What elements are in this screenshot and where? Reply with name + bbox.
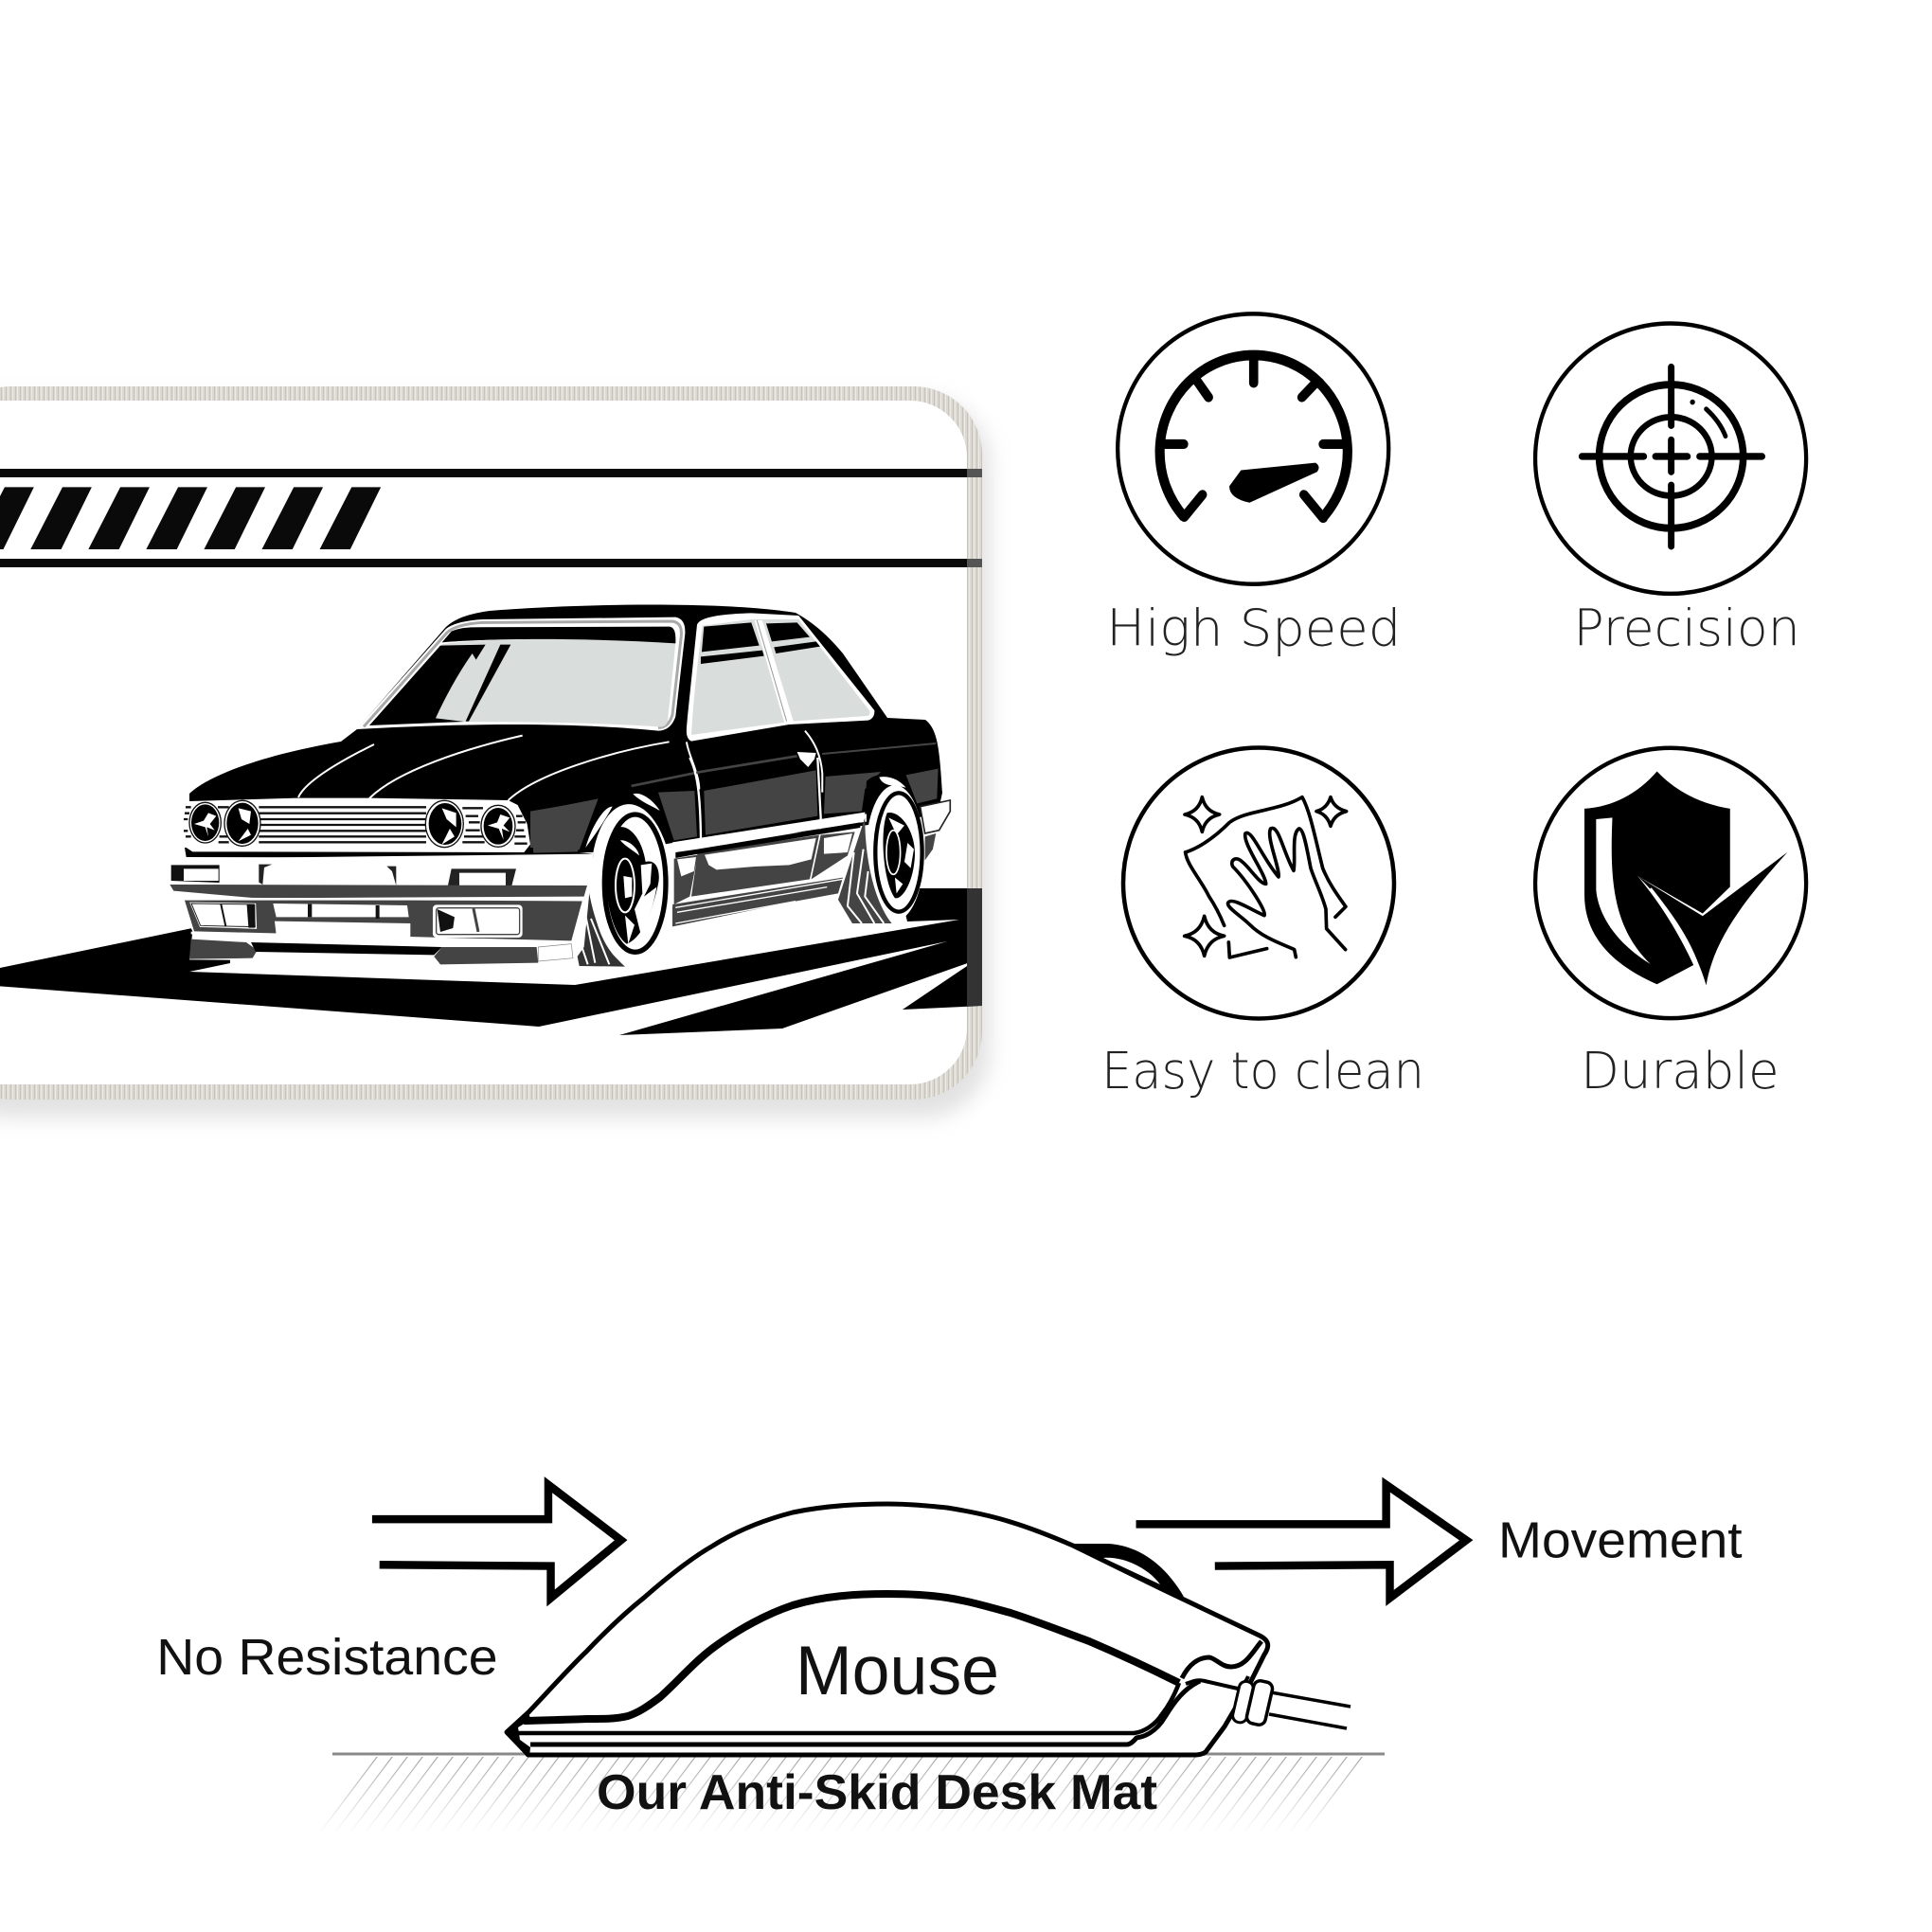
mouse outline (507, 1504, 1351, 1757)
label: Precision: Precision (1573, 599, 1800, 658)
rear bumper (921, 800, 950, 833)
lower door panels (674, 832, 855, 904)
front wheel tyre (576, 890, 625, 967)
lip spoiler (183, 898, 584, 901)
side windows (687, 613, 874, 742)
scroll wheel (1070, 1544, 1184, 1597)
rear wave (1182, 1641, 1261, 1678)
mat hatching (308, 1757, 1373, 1833)
label: High Speed: High Speed (1106, 599, 1401, 658)
dark side panels (530, 769, 939, 852)
white sill band (672, 812, 867, 852)
label: Easy to clean: Easy to clean (1101, 1041, 1424, 1100)
hood and door highlights (298, 731, 936, 800)
ground line (332, 1752, 1385, 1756)
front fascia (170, 794, 594, 964)
icons grid (1118, 313, 1806, 1019)
black strip under grille (185, 848, 594, 858)
door lines (689, 758, 821, 897)
icon: speedometer (1118, 313, 1388, 584)
headlights (189, 800, 515, 848)
bumper (170, 854, 594, 863)
icon: shield with check (1535, 748, 1806, 1018)
cable connector (1231, 1680, 1255, 1724)
label: Mouse: Mouse (796, 1633, 999, 1709)
lower valance and openings (185, 901, 582, 940)
grey panel beside headlight (530, 802, 585, 853)
illustration: black car (170, 604, 950, 969)
grille bars (184, 807, 528, 844)
label: Durable: Durable (1581, 1041, 1780, 1100)
side body lower panels (530, 758, 950, 969)
car body (187, 604, 942, 857)
windshield (357, 617, 685, 731)
grille panel (182, 794, 530, 852)
stripe: upper line (0, 469, 982, 477)
white ground plane (189, 892, 959, 985)
labels and arrows (156, 599, 1800, 1686)
arrow: movement (1136, 1485, 1466, 1598)
white base under front end (170, 852, 594, 963)
mat graphics: stripes and ground shadows (0, 469, 982, 1035)
slanted racing bars (0, 487, 381, 549)
icon: target (1535, 323, 1806, 594)
panel: desk mat (0, 386, 990, 1118)
rear wheel (838, 775, 924, 923)
mouse nose (507, 1710, 530, 1757)
label: Movement: Movement (1498, 1512, 1743, 1568)
label: No Resistance: No Resistance (156, 1630, 498, 1686)
stripe: lower line (0, 559, 982, 567)
ground shadow (0, 888, 982, 1035)
arch highlights (585, 794, 660, 848)
arrow: no resistance (372, 1485, 621, 1598)
front wheel rim (587, 802, 677, 969)
icon: cleaning hand (1123, 748, 1394, 1019)
side skirt (672, 878, 843, 926)
label: Our Anti-Skid Desk Mat: Our Anti-Skid Desk Mat (597, 1765, 1157, 1820)
